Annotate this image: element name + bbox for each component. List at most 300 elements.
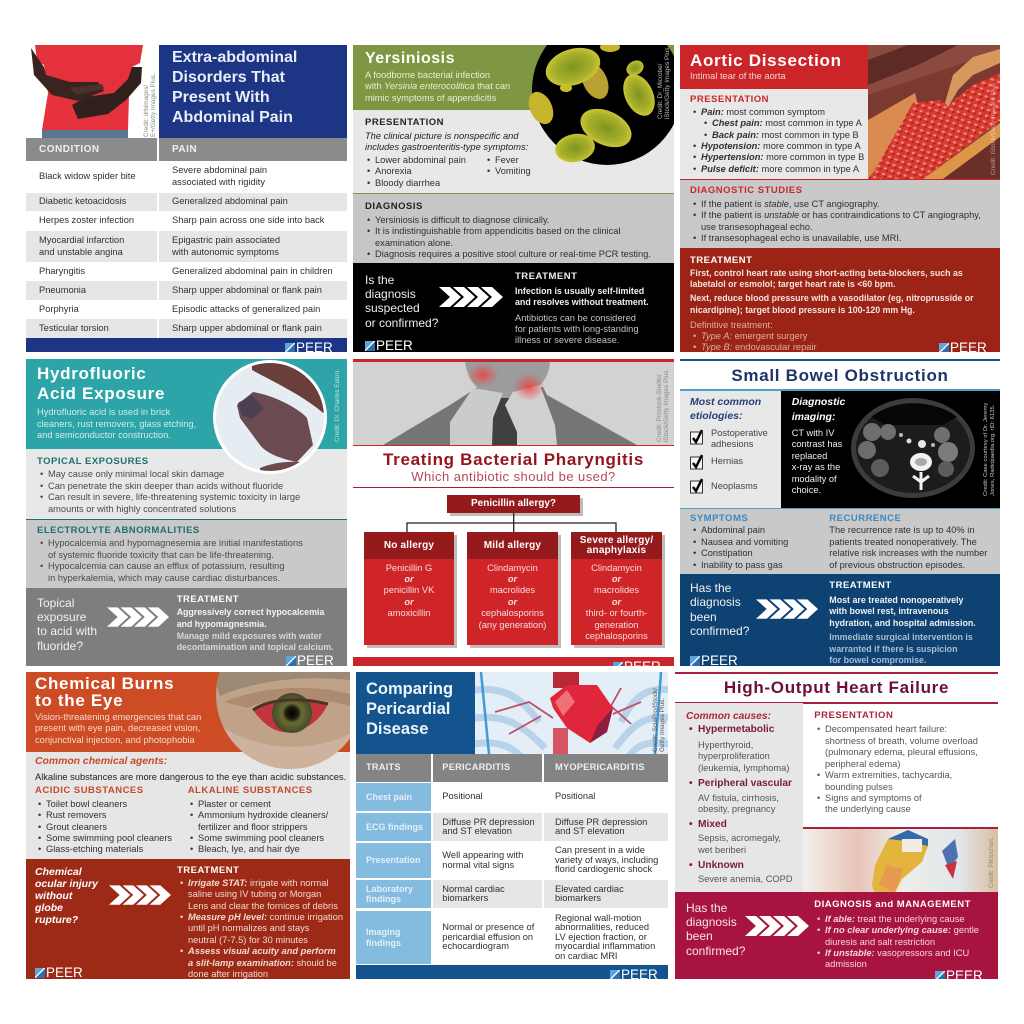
title: Acid Exposure — [37, 384, 165, 403]
treatment text: Most are treated nonoperatively — [829, 595, 963, 605]
electrolyte list: Hypocalcemia can cause an efflux of potassium, resulting — [48, 561, 285, 571]
subtitle: cleaners, rust removers, glass etching, — [37, 419, 196, 429]
heading: acidic substances: ACIDIC SUBSTANCES — [35, 785, 144, 796]
treatment step two: Next, reduce blood pressure with a vasodilator (eg, nitroprusside or — [690, 293, 974, 303]
photo credit — [143, 73, 157, 137]
trait row label — [356, 911, 431, 964]
antibiotic list: macrolides — [594, 585, 639, 595]
table row: Black widow spider bite — [39, 171, 136, 181]
option: mild allergy — [467, 532, 558, 645]
title — [37, 364, 165, 403]
presentation list: Back pain: most common in type B — [712, 130, 859, 140]
symptom list: Nausea and vomiting — [701, 537, 788, 547]
management list: diuresis and salt restriction — [825, 936, 935, 946]
recurrence text: relative risk increases with the number — [829, 548, 987, 558]
heading: topical exposures: TOPICAL EXPOSURES — [37, 456, 149, 467]
subtitle — [365, 70, 510, 103]
image credit: Jones, Radiopaedia.org. rID: 6135. — [990, 405, 996, 496]
cause detail: hyperproliferation — [698, 751, 770, 761]
imaging text — [792, 428, 842, 497]
option header: Severe allergy/ — [580, 535, 653, 546]
subtitle — [35, 712, 201, 746]
cell: pericardial effusion on — [442, 932, 533, 942]
table row: and unstable angina — [39, 246, 123, 256]
title block — [356, 672, 475, 754]
acidic list: Glass-etching materials — [46, 844, 143, 854]
imaging text: contrast has — [792, 439, 842, 449]
symptom list second column — [487, 155, 531, 176]
antibiotic list: or — [508, 574, 517, 584]
question: confirmed? — [690, 624, 749, 638]
option: no allergy — [364, 532, 454, 645]
heading: treatment: TREATMENT — [177, 594, 239, 605]
treatment step one: First, control heart rate using short-acting beta-blockers, such as — [690, 268, 963, 278]
question: diagnosis — [686, 915, 737, 929]
etiologies block — [680, 391, 781, 508]
cause: mixed: Mixed — [698, 819, 727, 830]
title rule — [675, 702, 998, 704]
etiology label: adhesions — [711, 439, 753, 449]
checkbox: postoperative adhesions — [690, 429, 705, 445]
table row — [159, 193, 347, 211]
cause: peripheral vascular: Peripheral vascular — [698, 778, 792, 789]
photo credit: iStock/Getty Images Plus. — [663, 369, 670, 442]
etiologies heading — [690, 394, 761, 424]
panel: comparing pericardial disease — [356, 672, 668, 979]
etiologies heading: etiologies: — [690, 410, 743, 422]
title: Disease — [366, 720, 428, 738]
topical list: Can penetrate the skin deeper than acids without fluoride — [48, 481, 283, 491]
subtitle — [37, 407, 196, 440]
antibiotic list: or — [612, 574, 621, 584]
treatment list: Measure pH level: continue irrigation — [188, 912, 343, 922]
presentation list: shortness of breath, volume overload — [825, 736, 978, 746]
table row: Sharp upper abdominal or flank pain — [172, 323, 322, 333]
diagnosis list: examination alone. — [375, 238, 453, 248]
photo credit: Credit: SciePro/iStock/ — [652, 688, 659, 752]
acidic list: Rust removers — [46, 810, 106, 820]
definitive list — [693, 331, 817, 352]
treatment list — [180, 878, 343, 981]
heading: presentation: PRESENTATION — [814, 710, 893, 721]
symptom list second column: Fever — [495, 155, 519, 165]
alkaline list: Some swimming pool cleaners — [198, 833, 324, 843]
treatment list: Irrigate STAT: irrigate with normal — [188, 878, 329, 888]
subtitle: present with eye pain, decreased vision, — [35, 723, 200, 733]
PEER logo — [935, 968, 987, 983]
etiology label: Neoplasms — [711, 481, 758, 491]
antibiotic list: macrolides — [490, 585, 535, 595]
cell: florid cardiogenic shock — [555, 864, 652, 874]
title: High-Output Heart Failure — [724, 678, 949, 697]
flow box: penicillin allergy — [447, 495, 580, 513]
cause detail: (leukemia, lymphoma) — [698, 762, 789, 772]
trait row label — [356, 813, 431, 841]
table row: Herpes zoster infection — [39, 215, 134, 225]
question: ocular injury — [35, 878, 98, 890]
heading: recurrence: RECURRENCE — [829, 513, 901, 524]
antibiotic list: cephalosporins — [585, 631, 648, 641]
recurrence text — [829, 525, 987, 571]
cell — [544, 880, 668, 908]
treatment text: and hypomagnesmia. — [177, 619, 267, 629]
table row — [159, 319, 347, 338]
question: diagnosis — [690, 595, 741, 609]
alkaline list: Ammonium hydroxide cleaners/ — [198, 810, 328, 820]
symptom list second column: Vomiting — [495, 166, 531, 176]
recurrence text: The recurrence rate is up to 40% in — [829, 525, 975, 535]
subtitle: with Yersinia enterocolitica that can — [365, 81, 510, 91]
cell — [433, 813, 542, 841]
question — [686, 900, 745, 958]
header band — [26, 359, 347, 449]
treatment list: Assess visual acuity and perform — [188, 946, 336, 956]
treatment text — [829, 595, 976, 629]
acidic list — [38, 799, 172, 856]
antibiotic list: Penicillin G — [386, 562, 432, 572]
topical list: May cause only minimal local skin damage — [48, 469, 224, 479]
cause detail: Sepsis, acromegaly, — [698, 833, 781, 843]
antibiotic list: or — [508, 597, 517, 607]
cell: Normal or presence of — [442, 922, 534, 932]
antibiotic list: third- or fourth- — [586, 608, 647, 618]
subtitle: conjunctival injection, and photophobia — [35, 735, 195, 745]
table row: Episodic attacks of generalized pain — [172, 304, 320, 314]
table header: condition — [26, 138, 157, 161]
cause: unknown: Unknown — [698, 860, 744, 871]
table row: Diabetic ketoacidosis — [39, 196, 126, 206]
treatment list: saline using IV tubing or Morgan — [188, 889, 321, 899]
photo rule — [353, 445, 674, 446]
definitive list: Type B: endovascular repair — [701, 342, 817, 352]
treatment text: Aggressively correct hypocalcemia — [177, 607, 324, 617]
question: Chemical — [35, 866, 82, 878]
title: Disorders That — [172, 69, 285, 86]
header band — [26, 672, 350, 752]
question: without — [35, 890, 72, 902]
diagnosis band — [353, 193, 674, 263]
heading: presentation: PRESENTATION — [690, 94, 769, 105]
panel: aortic dissection — [680, 45, 1000, 352]
header band — [353, 45, 674, 110]
option header — [364, 532, 454, 559]
imaging heading — [792, 394, 845, 425]
acidic list: Some swimming pool cleaners — [46, 833, 172, 843]
heading: treatment: TREATMENT — [177, 865, 239, 876]
photo credit: iStock/Getty Images Plus. — [664, 46, 671, 119]
cell: Positional — [555, 791, 595, 801]
antibiotic list: Clindamycin — [591, 562, 642, 572]
etiology label: Hernias — [711, 456, 743, 466]
cause detail: Severe anemia, COPD — [698, 874, 793, 884]
table row: Pneumonia — [39, 285, 86, 295]
recurrence text: patients treated nonoperatively. The — [829, 537, 977, 547]
cell: normal vital signs — [442, 860, 514, 870]
treatment note — [829, 632, 973, 667]
table row — [159, 281, 347, 300]
title: Comparing — [366, 680, 453, 698]
table row: associated with rigidity — [172, 176, 265, 186]
photo: heart model — [803, 828, 998, 892]
panel: yersiniosis — [353, 45, 674, 352]
subtitle: Vision-threatening emergencies that can — [35, 712, 201, 722]
presentation list: Hypertension: more common in type B — [701, 152, 864, 162]
imaging text: choice. — [792, 485, 821, 495]
electrolyte band — [26, 519, 347, 588]
treatment note: Immediate surgical intervention is — [829, 632, 973, 642]
treatment list: neutral (7-7.5) for 30 minutes — [188, 935, 308, 945]
cell: myocardial inflammation — [555, 941, 655, 951]
diagnostic studies band — [680, 179, 1000, 248]
imaging heading: Diagnostic — [792, 396, 845, 408]
trait row label: Imaging — [366, 927, 401, 937]
table header: condition: CONDITION — [39, 144, 100, 155]
connector lines — [406, 513, 617, 532]
title block — [159, 45, 347, 138]
subtitle: Hydrofluoric acid is used in brick — [37, 407, 170, 417]
question — [37, 596, 97, 653]
presentation list: bounding pulses — [825, 782, 893, 792]
table header: pain — [159, 138, 347, 161]
diagnosis list: Yersiniosis is difficult to diagnose clinically. — [375, 215, 550, 225]
header: myopericarditis: MYOPERICARDITIS — [555, 762, 645, 772]
title: Small Bowel Obstruction — [731, 366, 949, 385]
table row: Epigastric pain associated — [172, 235, 280, 245]
title — [172, 49, 297, 126]
cell — [433, 880, 542, 908]
title — [35, 675, 174, 709]
presentation list: Signs and symptoms of — [825, 793, 922, 803]
header: pericarditis: PERICARDITIS — [442, 762, 510, 772]
management list: If unstable: vasopressors and ICU — [825, 948, 969, 958]
option header — [467, 532, 558, 559]
presentation list: peripheral edema) — [825, 759, 900, 769]
antibiotic list — [585, 562, 648, 641]
table header: pain: PAIN — [172, 144, 197, 155]
presentation list — [817, 724, 978, 816]
question: confirmed? — [686, 944, 745, 958]
cell: Can present in a wide — [555, 845, 645, 855]
flow box: penicillin allergy: Penicillin allergy? — [471, 498, 556, 509]
treatment list: a slit-lamp examination: should be — [188, 958, 337, 968]
cell: on cardiac MRI — [555, 951, 618, 961]
photo credit — [656, 369, 670, 442]
question: globe — [35, 902, 63, 914]
antibiotic list: cephalosporins — [481, 608, 544, 618]
heading: common chemical agents: Common chemical agents: — [35, 756, 167, 767]
table row — [26, 193, 157, 211]
treatment text: and resolves without treatment. — [515, 297, 649, 307]
intro text: includes gastroenteritis-type symptoms: — [365, 142, 528, 152]
photo credit: Credit: Prostock-Studio/ — [656, 375, 663, 442]
title: Hydrofluoric — [37, 364, 146, 383]
CT scan image — [849, 393, 979, 505]
intro sentence: Alkaline substances are more dangerous to the eye than acidic substances. — [35, 772, 346, 782]
title rule — [353, 487, 674, 488]
arrow chevrons — [109, 885, 171, 905]
top rule — [353, 359, 674, 362]
photo: aorta with blood cells — [868, 45, 1000, 179]
question: fluoride? — [37, 639, 83, 653]
treatment note — [515, 312, 639, 345]
etiology label: Postoperative — [711, 428, 768, 438]
subtitle: mimic symptoms of appendicitis — [365, 93, 496, 103]
question: Has the — [686, 900, 727, 914]
alkaline list: Bleach, lye, and hair dye — [198, 844, 300, 854]
question: Is the — [365, 272, 394, 286]
table row — [172, 165, 267, 187]
question: suspected — [365, 301, 420, 315]
treatment text: hydration, and hospital admission. — [829, 618, 976, 628]
heading: symptoms: SYMPTOMS — [690, 513, 748, 524]
heading: treatment: TREATMENT — [515, 271, 577, 282]
treatment note: illness or severe disease. — [515, 335, 619, 345]
cell: Regional wall-motion — [555, 913, 641, 923]
cause detail — [698, 793, 779, 816]
diagnosis list: Diagnosis requires a positive stool culture or real-time PCR testing. — [375, 249, 651, 259]
photo: hands on throat — [353, 362, 674, 445]
cell — [544, 843, 668, 878]
diagnosis list: It is indistinguishable from appendicitis based on the clinical — [375, 226, 620, 236]
arrow chevrons — [745, 916, 809, 936]
antibiotic list — [479, 562, 546, 630]
photo: burned finger in circle — [213, 360, 327, 474]
recurrence text: of previous obstruction episodes. — [829, 560, 965, 570]
trait row label — [356, 843, 431, 878]
checkbox: neoplasms — [690, 478, 705, 494]
header band — [680, 45, 868, 89]
question: been — [690, 610, 717, 624]
cell — [433, 911, 542, 964]
title rule — [680, 389, 1000, 391]
illustration: heart and ribs — [475, 672, 668, 754]
trait row label — [356, 880, 431, 908]
cause detail — [698, 833, 781, 856]
presentation list: Warm extremities, tachycardia, — [825, 770, 952, 780]
cause detail: wet beriberi — [698, 845, 746, 855]
title: Aortic Dissection — [690, 51, 842, 70]
symptom list — [367, 155, 466, 188]
question: or confirmed? — [365, 316, 438, 330]
title: Present With — [172, 89, 270, 106]
antibiotic list — [384, 562, 434, 618]
question: diagnosis — [365, 287, 416, 301]
symptom list: Abdominal pain — [701, 525, 765, 535]
trait row label: Presentation — [366, 855, 421, 865]
panel: small bowel obstruction — [680, 359, 1000, 666]
arrow chevrons — [756, 599, 818, 619]
table row: Generalized abdominal pain in children — [172, 266, 333, 276]
section rule — [803, 827, 998, 828]
photo: woman holding abdomen — [31, 45, 143, 138]
definitive treatment: Definitive treatment: — [690, 320, 773, 330]
option: severe allergy — [571, 532, 662, 645]
topical list: Can result in severe, life-threatening systemic toxicity in large — [48, 492, 300, 502]
cell: Normal cardiac — [442, 884, 505, 894]
top rule — [680, 359, 1000, 361]
option header: anaphylaxis — [587, 545, 646, 556]
treatment note: for bowel compromise. — [829, 655, 926, 665]
table row — [26, 281, 157, 300]
presentation list: (pulmonary edema, pleural effusions, — [825, 747, 978, 757]
photo credit: Getty Images Plus. — [659, 698, 666, 752]
cell — [544, 813, 668, 841]
title: Abdominal Pain — [172, 109, 293, 126]
imaging text: CT with IV — [792, 428, 834, 438]
antibiotic list: generation — [595, 620, 638, 630]
symptom list: Constipation — [701, 548, 753, 558]
photo credit: Credit: Piktochart. — [988, 837, 995, 888]
treatment text — [177, 607, 324, 629]
title: Chemical Burns — [35, 674, 174, 693]
alkaline list: Plaster or cement — [198, 799, 271, 809]
cause detail — [698, 740, 789, 774]
table row: Generalized abdominal pain — [172, 196, 288, 206]
heading: diagnostic studies: DIAGNOSTIC STUDIES — [690, 185, 802, 196]
photo credit: Credit: drbimages/ — [143, 85, 150, 137]
table row — [26, 319, 157, 338]
panel: treating bacterial pharyngitis — [353, 359, 674, 666]
title: Extra-abdominal — [172, 49, 297, 66]
arrow chevrons — [439, 287, 503, 307]
causes block — [675, 703, 803, 892]
title — [366, 679, 453, 739]
cell: and ST elevation — [555, 826, 625, 836]
intro text: The clinical picture is nonspecific and — [365, 130, 518, 140]
cell: variety of ways, including — [555, 855, 658, 865]
symptom list: Lower abdominal pain — [375, 155, 466, 165]
alkaline list: fertilizer and floor strippers — [198, 822, 308, 832]
cell: biomarkers — [442, 893, 488, 903]
treatment note: Antibiotics can be considered — [515, 312, 636, 322]
photo credit: E+/Getty Images Plus. — [150, 73, 157, 137]
antibiotic list: amoxicillin — [388, 608, 430, 618]
photo credit: Credit: Dr. Charles Eaton. — [334, 369, 341, 442]
presentation list: Hypotension: more common in type A — [701, 141, 861, 151]
title: Treating Bacterial Pharyngitis — [383, 450, 644, 469]
question: Has the — [690, 581, 731, 595]
cell: Positional — [442, 791, 483, 801]
treatment note — [177, 631, 334, 652]
etiologies heading: Most common — [690, 396, 761, 408]
imaging heading: imaging: — [792, 411, 835, 423]
antibiotic list: (any generation) — [479, 620, 546, 630]
question — [690, 581, 749, 639]
diagnostic list: If transesophageal echo is unavailable, use MRI. — [701, 233, 902, 243]
subtitle: and semiconductor construction. — [37, 430, 171, 440]
trait row label: Laboratory — [366, 884, 413, 894]
heading: diagnosis: DIAGNOSIS — [365, 201, 423, 212]
table row: Sharp pain across one side into back — [172, 215, 324, 225]
imaging text: replaced — [792, 451, 827, 461]
table row: with autonomic symptoms — [172, 246, 279, 256]
header: myopericarditis — [544, 754, 668, 782]
cause detail: Hyperthyroid, — [698, 740, 753, 750]
presentation list: Pain: most common symptom — [701, 107, 825, 117]
cell: biomarkers — [555, 893, 601, 903]
treatment band — [680, 248, 1000, 352]
heading: alkaline substances: ALKALINE SUBSTANCES — [188, 785, 313, 796]
PEER logo — [35, 965, 87, 980]
treatment list: done after irrigation — [188, 969, 268, 979]
cell: Well appearing with — [442, 850, 523, 860]
option header: No allergy — [384, 540, 434, 551]
management list: If able: treat the underlying cause — [825, 914, 965, 924]
diagnostic list: use transesophageal echo. — [701, 222, 813, 232]
photo credit: Credit: iStock/Getty Images Plus. — [990, 81, 997, 175]
panel: hydrofluoric acid exposure — [26, 359, 347, 666]
etiology label — [711, 428, 768, 451]
